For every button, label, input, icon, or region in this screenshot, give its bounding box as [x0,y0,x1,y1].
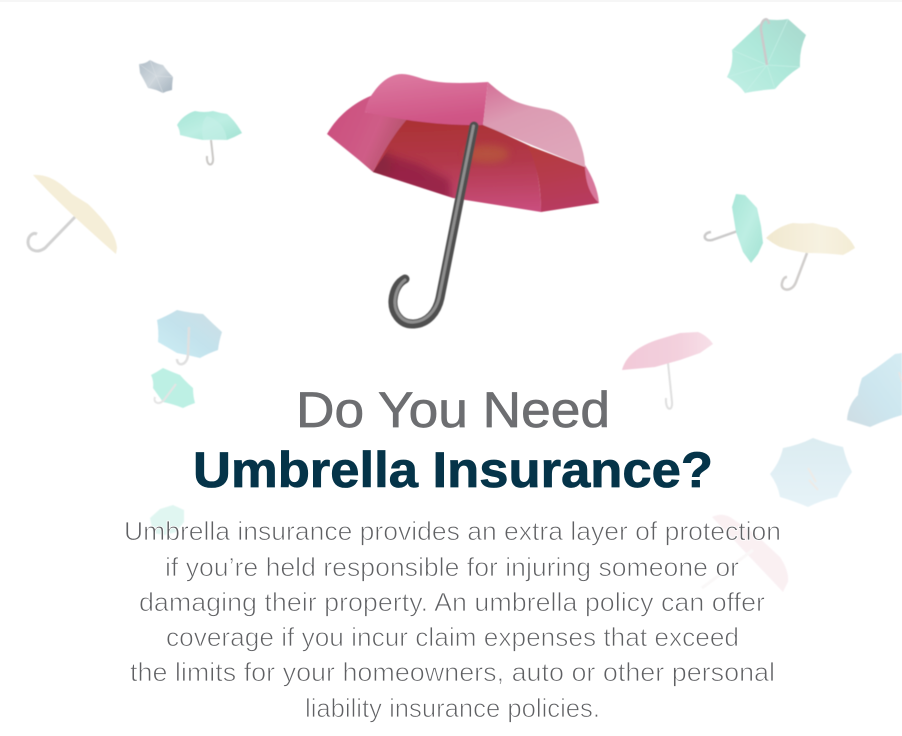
umbrella underside [373,118,541,212]
umbrella top right light panel [483,82,585,167]
icon: grey umbrella [139,60,173,93]
umbrella top front panel [365,74,488,125]
umbrella shaft and hook [393,126,474,324]
icon: pink umbrella right [622,332,713,409]
icon: cream umbrella right [766,223,855,290]
icon: faded pink umbrella behind text [702,515,788,592]
umbrella underside right [527,145,599,212]
icon: faded teal umbrella behind text [150,505,184,535]
icon: cream umbrella left [28,175,117,254]
text block: description: liability insurance policies. [305,693,600,723]
icon: teal umbrella top right [727,19,806,93]
text block: description [124,516,781,723]
umbrella underside shadow and glow [373,144,508,198]
umbrella left panel [327,95,412,172]
icon: teal umbrella side right [705,194,763,263]
text block: description: the limits for your homeowners, auto or other personal [130,657,775,687]
icon: blue umbrella left [157,310,222,364]
umbrella right tip [585,165,599,203]
text block: description: if you’re held responsible for injuring someone or [165,552,739,582]
heading: Do You Need: Do You Need [296,382,610,438]
top edge strip [0,0,902,2]
heading: Umbrella Insurance?: Umbrella Insurance? [193,442,713,498]
icon: pale blue umbrella right [770,438,852,507]
icon: teal umbrella lower left [151,368,195,408]
text block: description: Umbrella insurance provides an extra layer of protection [124,516,781,546]
icon: teal umbrella upper left [177,111,242,165]
text block: description: coverage if you incur claim expenses that exceed [166,622,739,652]
icon: blue umbrella far right [847,353,902,427]
icon: large pink umbrella [327,74,599,324]
text block: description: damaging their property. An umbrella policy can offer [139,587,765,617]
